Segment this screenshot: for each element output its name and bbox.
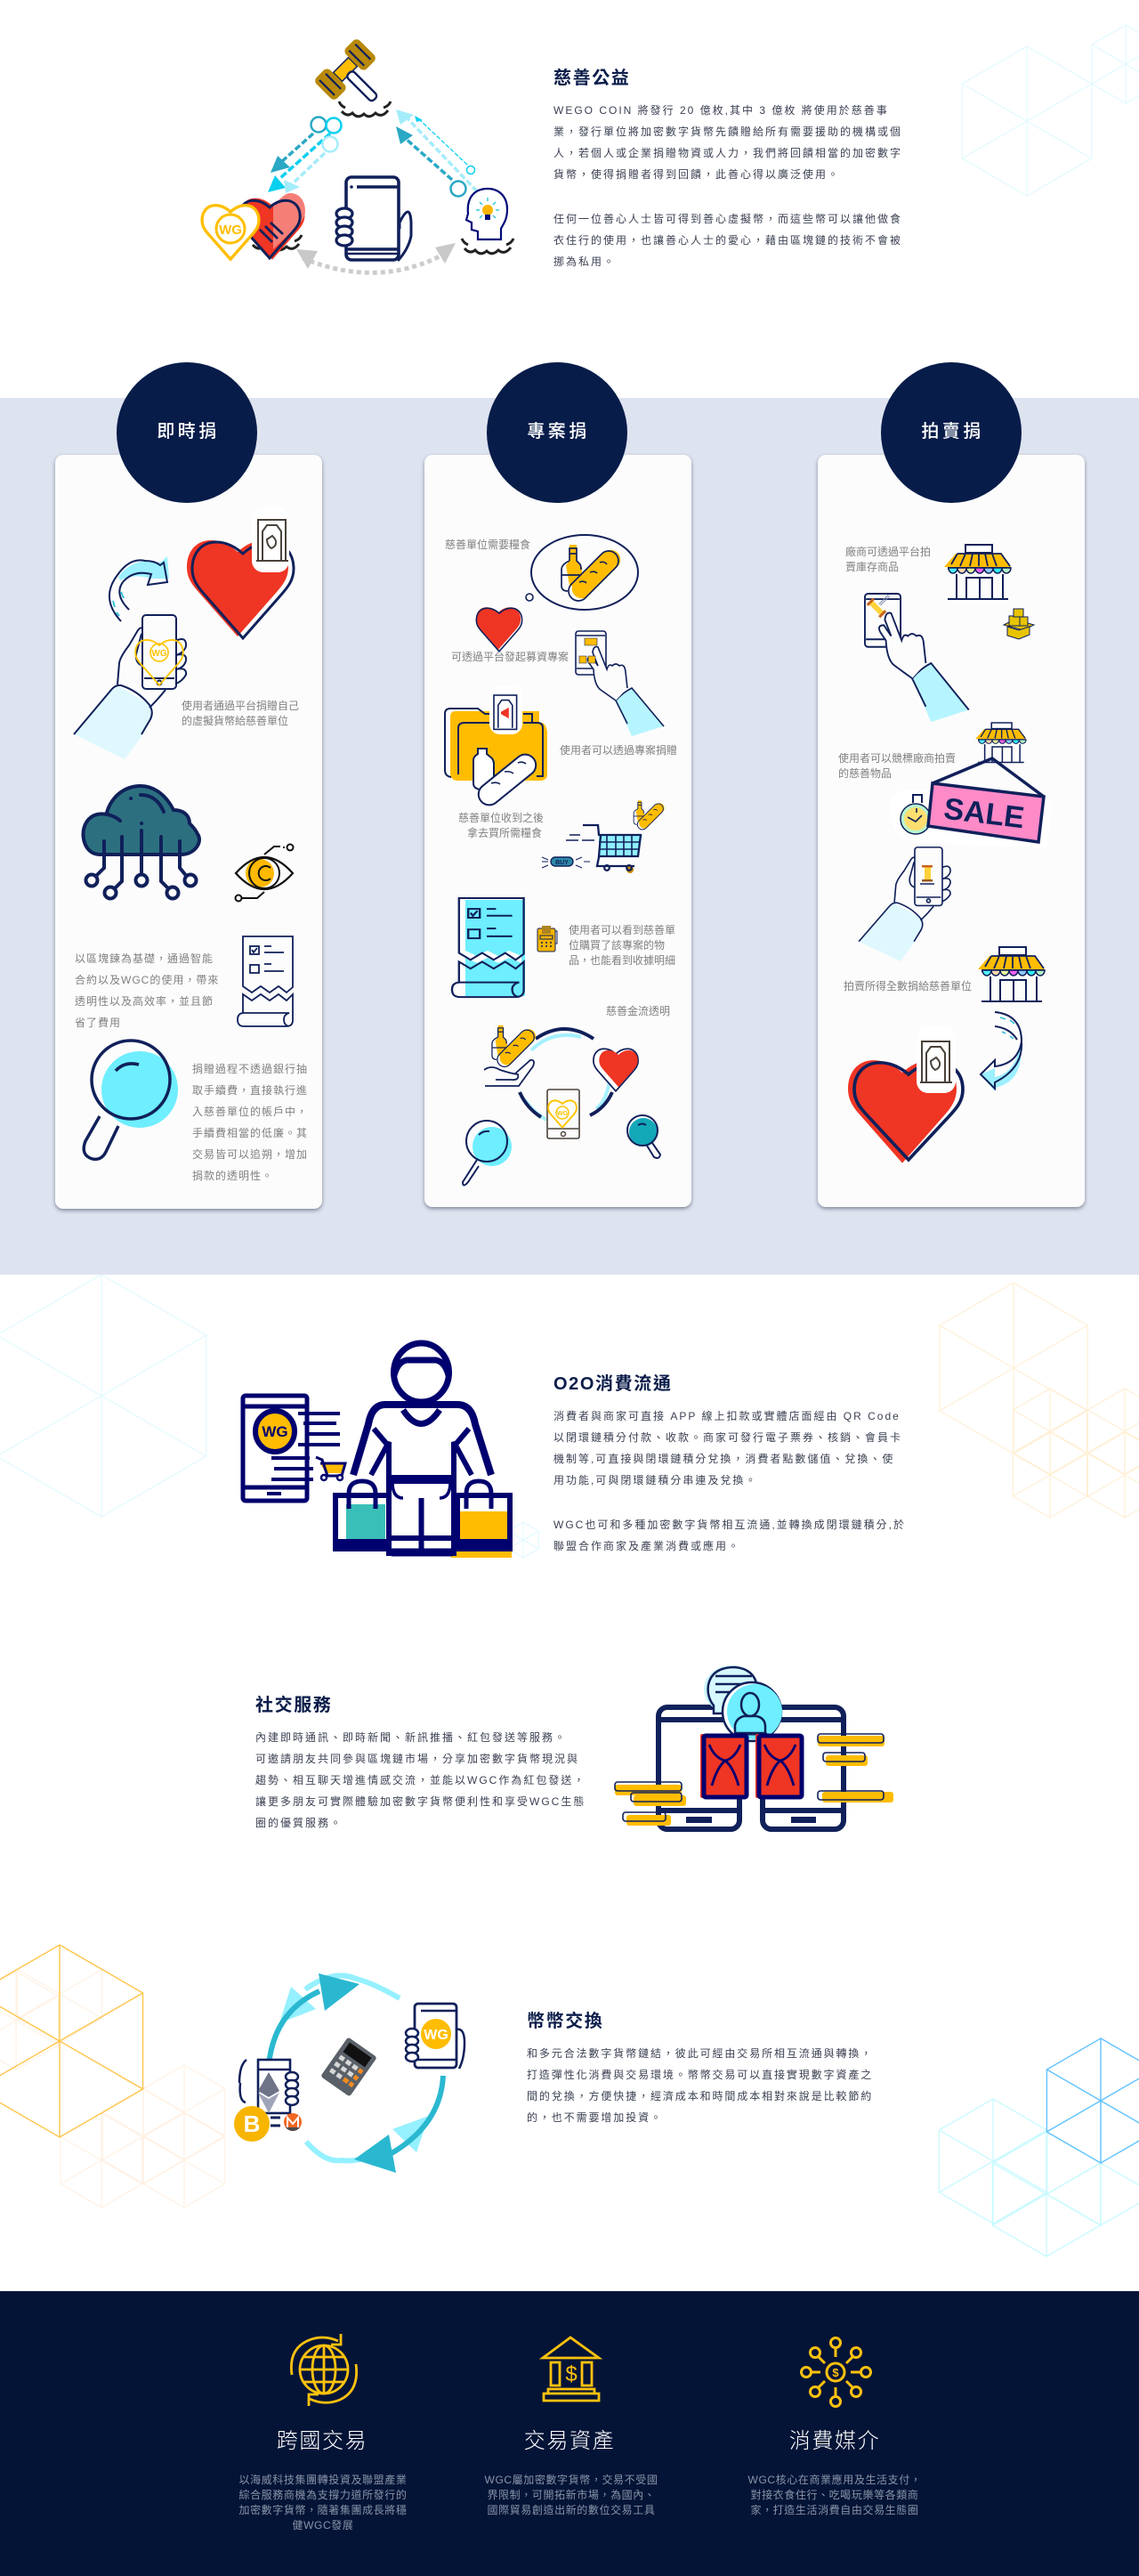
text block: social description: 可邀請朋友共同參與區塊鏈市場，分享加密數字貨幣現況與 xyxy=(255,1753,579,1765)
text block: O2O description: 機制等,可直接與閉環鏈積分兌換，消費者點數儲值、兌換、使 xyxy=(553,1453,894,1465)
text: charity buys food: 拿去買所需糧食 xyxy=(467,827,542,839)
text: cross-border trade: 以海威科技集團轉投資及聯盟產業 xyxy=(238,2474,408,2486)
text: user donates via project: 使用者可以透過專案捐贈 xyxy=(560,744,677,757)
text: proceeds donated: 拍賣所得全數捐給慈善單位 xyxy=(844,980,972,992)
icon: message bubble xyxy=(704,1665,759,1713)
icon: SALE sign with stopwatch: SALE xyxy=(942,792,1026,835)
icon: pointing hand on tablet xyxy=(576,631,664,736)
text: transaction fees xyxy=(192,1063,308,1182)
icon: SALE sign with stopwatch xyxy=(890,758,1053,848)
arrow: grey dotted return xyxy=(296,243,456,272)
text block: social description: 趨勢、相互聊天增進情感交流，並能以WGC作為紅包發送， xyxy=(255,1774,586,1786)
badge: instant donation xyxy=(117,362,257,503)
text: blockchain efficiency: 透明性以及高效率，並且節 xyxy=(75,995,214,1008)
heading: trading assets: 交易資產 xyxy=(524,2429,615,2453)
heading: O2O: O2O消費流通 xyxy=(553,1374,672,1394)
icon: small shop xyxy=(975,723,1026,763)
icon: bank xyxy=(539,2336,603,2402)
text: receipts visible: 使用者可以看到慈善單 xyxy=(569,924,675,936)
text block: charity description: 挪為私用。 xyxy=(553,255,616,268)
text: user donates xyxy=(182,700,299,727)
icon: user bubble xyxy=(723,1682,782,1741)
icon: payment network xyxy=(800,2337,872,2408)
icon: hand with WG phone xyxy=(406,2004,464,2069)
panel: instant donation card xyxy=(55,455,322,1209)
text: cross-border trade: 綜合服務商機為支撐力道所發行的 xyxy=(238,2489,408,2501)
icon: POS terminal xyxy=(537,926,557,952)
icon: big heart with door xyxy=(187,507,294,638)
text: trading assets xyxy=(484,2474,658,2516)
text: charity needs food: 慈善單位需要糧食 xyxy=(445,539,530,551)
text: transaction fees: 取手續費，直接執行進 xyxy=(192,1084,308,1097)
text block: exchange description: 打造彈性化消費與交易環境。幣幣交易可以直接實現數字資產之 xyxy=(527,2069,873,2081)
text: user donates: 使用者通過平台捐贈自己 xyxy=(182,700,299,712)
text: consumption medium xyxy=(747,2474,921,2516)
text: consumption medium: WGC核心在商業應用及生活支付， xyxy=(748,2474,921,2486)
icon: hand with ethereum phone xyxy=(239,2060,298,2113)
icon: right phone xyxy=(763,1707,844,1829)
badge: auction donation: 拍賣捐 xyxy=(921,422,984,441)
icon: curved arrow down xyxy=(981,1012,1022,1091)
icon: shop with charity xyxy=(978,947,1045,1001)
illustration: project donation icons xyxy=(444,534,665,1186)
icon: left phone xyxy=(658,1707,739,1829)
text block: charity description: 任何一位善心人士皆可得到善心虛擬幣，而這些幣可以讓他做食 xyxy=(553,213,902,225)
icon: eye with coin xyxy=(235,844,294,901)
icon: shopping bags xyxy=(335,1481,512,1558)
icon: phone panel with coin: WG xyxy=(262,1423,288,1440)
icon: pointing hand on tablet with gavel xyxy=(865,588,969,722)
panel: project donation card xyxy=(424,455,691,1207)
badge: instant donation: 即時捐 xyxy=(157,422,220,441)
icon: wave under gavel xyxy=(339,101,391,117)
text: receipts visible xyxy=(569,924,675,967)
heading: charity: 慈善公益 xyxy=(553,69,630,88)
icon: hand with WG phone: WG xyxy=(424,2028,448,2043)
illustration: O2O shopper xyxy=(240,1341,513,1558)
icon: large receipt xyxy=(452,898,525,997)
icon: bitcoin: B xyxy=(244,2110,260,2137)
icon: shopping cart xyxy=(566,825,642,873)
text block: social description: 圈的優質服務。 xyxy=(255,1817,343,1829)
text: transaction fees: 捐款的透明性。 xyxy=(192,1170,273,1182)
illustration: currency exchange xyxy=(234,1973,466,2173)
icon: shop xyxy=(944,545,1011,599)
text block: exchange description: 和多元合法數字貨幣鏈結，彼此可經由交易所相互流通與轉換， xyxy=(527,2047,873,2060)
icon: magnifier xyxy=(84,1041,178,1159)
text: transparent flow: 慈善金流透明 xyxy=(606,1005,670,1017)
icon: wave under heart xyxy=(250,235,302,250)
text: users bid: 使用者可以競標廠商拍賣 xyxy=(838,752,956,765)
heading: exchange: 幣幣交換 xyxy=(527,2012,603,2031)
badge: project donation xyxy=(487,362,627,503)
text block: exchange description: 的，也不需要增加投資。 xyxy=(527,2111,663,2124)
text: users bid xyxy=(838,752,956,780)
icon: calculator xyxy=(320,2037,377,2097)
text block: social description: 讓更多朋友可實際體驗加密數字貨幣便利性和享受WGC生態 xyxy=(255,1795,586,1808)
panel: auction donation card xyxy=(818,455,1085,1207)
text block: social description: 內建即時通訊、即時新聞、新訊推播、紅包發送等服務。 xyxy=(255,1731,567,1744)
icon: hand holding phone with gavel xyxy=(859,847,950,961)
illustration: instant donation icons xyxy=(73,519,295,1161)
text: cross-border trade: 健WGC發展 xyxy=(293,2519,353,2531)
illustration: social phones xyxy=(614,1665,893,1832)
icon: phone in loop: WG xyxy=(557,1111,569,1117)
text: consumption medium: 對接衣食住行、吃喝玩樂等各類商 xyxy=(750,2489,918,2501)
icon: phone in hand xyxy=(336,177,411,261)
panel: footer xyxy=(0,2291,1139,2576)
icon: buy button xyxy=(542,857,590,868)
icon: bitcoin xyxy=(234,2106,270,2142)
badge: project donation: 專案捐 xyxy=(527,422,590,441)
text: vendors auction stock: 廠商可透過平台拍 xyxy=(845,546,931,558)
icon: cloud circuit xyxy=(84,786,199,899)
icon: phone in loop xyxy=(547,1090,579,1138)
icon: person xyxy=(353,1343,491,1553)
icon: phone panel with coin xyxy=(242,1396,340,1501)
icon: curved arrow xyxy=(109,556,169,621)
text: blockchain efficiency: 省了費用 xyxy=(75,1017,121,1029)
icon: hand holding phone: WG xyxy=(151,649,167,659)
icon: head with idea bulb xyxy=(466,189,507,239)
badge: auction donation xyxy=(881,362,1022,503)
icon: food small xyxy=(634,800,666,831)
text block: O2O description: 用功能,可與閉環鏈積分串連及兌換。 xyxy=(553,1474,757,1486)
text block: charity description: 貨幣，使得捐贈者得到回饋，此善心得以廣泛使用。 xyxy=(553,168,840,181)
text block: charity description: 衣住行的使用，也讓善心人士的愛心，藉由區塊鏈的技術不會被 xyxy=(553,234,902,247)
icon: globe xyxy=(290,2334,358,2406)
icon: receipt xyxy=(238,936,293,1026)
icon: yellow message bars xyxy=(615,1734,893,1826)
arrows: downward to charity xyxy=(268,117,342,193)
icon: wave under head xyxy=(462,239,513,254)
icon: food in open hand xyxy=(484,1025,538,1086)
icon: handshake heart xyxy=(239,193,305,260)
text: transaction fees: 交易皆可以追朔，增加 xyxy=(192,1148,308,1161)
icon: buy button: BUY xyxy=(555,860,569,866)
text: consumption medium: 家，打造生活消費自由交易生態圈 xyxy=(750,2504,918,2516)
text: blockchain efficiency: 合約以及WGC的使用，帶來 xyxy=(75,974,219,986)
text block: charity description: 人，若個人或企業捐贈物資或人力，我們將回饋相當的加密數字 xyxy=(553,147,902,159)
text block: O2O description: 聯盟合作商家及產業消費或應用。 xyxy=(553,1540,740,1552)
icon: big heart with door xyxy=(848,1026,963,1163)
icon: link bars xyxy=(271,2118,280,2126)
text block: O2O description xyxy=(553,1410,906,1552)
text: receipts visible: 位購買了該專案的物 xyxy=(569,939,665,952)
text: charity buys food xyxy=(458,812,544,839)
text: receipts visible: 品，也能看到收據明細 xyxy=(569,954,675,967)
icon: hand holding phone xyxy=(74,615,186,759)
text block: exchange description: 間的兌換，方便快捷，經濟成本和時間成本相對來說是比較節約 xyxy=(527,2090,873,2102)
text: users bid: 的慈善物品 xyxy=(838,767,892,780)
icon: cycle arrows xyxy=(269,1973,443,2173)
icon: payment network: $ xyxy=(832,2366,839,2379)
text: vendors auction stock xyxy=(845,546,931,573)
heading: social: 社交服務 xyxy=(255,1696,332,1715)
panel: donation band background xyxy=(0,398,1139,1275)
illustration: charity donation cycle xyxy=(200,39,514,275)
text: trading assets: WGC屬加密數字貨幣，交易不受國 xyxy=(485,2474,658,2486)
chart: donation loop arcs xyxy=(520,1029,612,1120)
icon: WG coin heart xyxy=(202,206,259,259)
heading: consumption medium: 消費媒介 xyxy=(789,2429,880,2453)
icon: monero xyxy=(284,2113,302,2131)
icon: left magnifier xyxy=(463,1121,512,1186)
icon: bank: $ xyxy=(565,2362,578,2386)
text block: O2O description: 消費者與商家可直接 APP 線上扣款或實體店面經由 QR Code xyxy=(553,1410,901,1422)
text block: charity description xyxy=(553,104,902,268)
icon: red envelopes xyxy=(700,1734,802,1798)
heading: cross-border trade: 跨國交易 xyxy=(277,2429,368,2453)
text: start campaign: 可透過平台發起募資專案 xyxy=(451,651,569,663)
text: cross-border trade xyxy=(238,2474,408,2531)
text: charity buys food: 慈善單位收到之後 xyxy=(458,812,544,824)
icon: stacked boxes xyxy=(1004,609,1034,639)
text: transaction fees: 手續費相當的低廉。其 xyxy=(192,1127,308,1139)
text block: charity description: 業，發行單位將加密數字貨幣先饋贈給所有需要援助的機構或個 xyxy=(553,126,902,138)
text block: O2O description: WGC也可和多種加密數字貨幣相互流通,並轉換成閉環鏈積分,於 xyxy=(553,1519,906,1531)
icon: right magnifier xyxy=(627,1115,660,1158)
text block: social description xyxy=(255,1731,586,1829)
text: user donates: 的虛擬貨幣給慈善單位 xyxy=(182,715,288,727)
text: blockchain efficiency xyxy=(75,952,219,1029)
text: trading assets: 國際貿易創造出新的數位交易工具 xyxy=(487,2504,655,2516)
text: transaction fees: 捐贈過程不透過銀行抽 xyxy=(192,1063,308,1075)
arrows: upward to auction xyxy=(396,109,477,196)
icon: WG coin heart: WG xyxy=(219,223,242,238)
text: transaction fees: 入慈善單位的帳戶中， xyxy=(192,1106,308,1118)
text: blockchain efficiency: 以區塊鍊為基礎，通過智能 xyxy=(75,952,214,965)
text block: exchange description xyxy=(527,2047,873,2124)
icon: small heart xyxy=(476,607,522,652)
icon: heart in loop xyxy=(594,1049,638,1091)
text block: O2O description: 以閉環鏈積分付款、收款。商家可發行電子票券、核銷、會員卡 xyxy=(553,1431,902,1444)
text block: charity description: WEGO COIN 將發行 20 億枚,其中 3 億枚 將使用於慈善事 xyxy=(553,104,889,117)
text: cross-border trade: 加密數字貨幣，隨著集團成長將穩 xyxy=(238,2504,408,2516)
text: vendors auction stock: 賣庫存商品 xyxy=(845,561,899,573)
icon: thought bubble with food xyxy=(526,535,638,610)
icon: folder with food xyxy=(445,685,547,809)
icon: gavel xyxy=(314,38,396,120)
icon: cart xyxy=(316,1457,345,1480)
illustration: auction donation icons xyxy=(848,544,1046,1162)
text: trading assets: 界限制，可開拓新市場，為國內、 xyxy=(487,2489,655,2501)
